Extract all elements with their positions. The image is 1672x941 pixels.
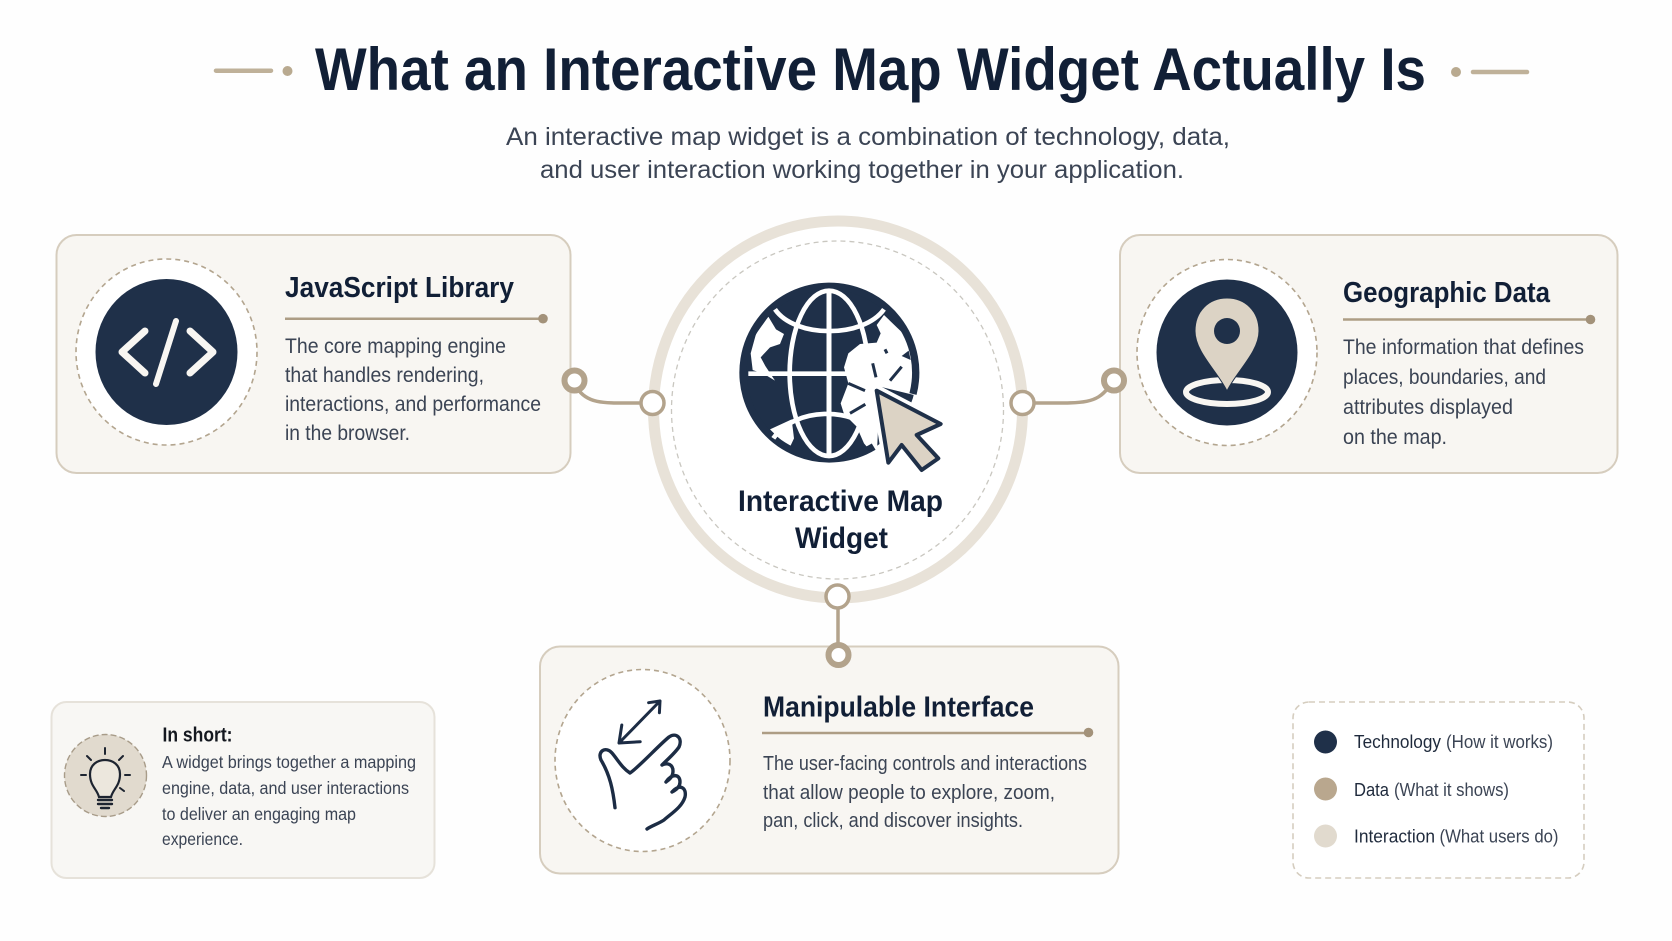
icon: pinch gesture hand — [555, 670, 730, 852]
panel: JavaScript Library — [56, 235, 570, 473]
callout text: experience. — [162, 829, 243, 849]
callout text: to deliver an engaging map — [162, 804, 356, 824]
body text — [763, 753, 1087, 832]
body text: interactions, and performance — [285, 393, 541, 416]
body text — [285, 335, 541, 445]
panel: Geographic Data — [1120, 235, 1618, 473]
subtitle: An interactive map widget is a combination of technology, data, — [506, 123, 1230, 151]
connector: hub to JavaScript Library — [564, 370, 664, 414]
heading rule — [1343, 315, 1595, 324]
subtitle — [506, 123, 1230, 184]
body text — [1343, 336, 1584, 449]
body text: The information that defines — [1343, 336, 1584, 359]
callout text — [162, 752, 416, 849]
icon: globe with cursor — [742, 285, 941, 470]
legend — [1293, 702, 1584, 878]
heading: Geographic Data — [1343, 277, 1551, 309]
heading: JavaScript Library — [285, 272, 514, 304]
hub label: Widget — [795, 522, 888, 555]
legend item: Data — [1314, 778, 1509, 800]
legend item: Interaction: Interaction — [1354, 826, 1435, 846]
panel: Manipulable Interface — [540, 646, 1118, 874]
legend item: Interaction: (What users do) — [1440, 826, 1558, 846]
heading rule — [285, 314, 548, 324]
title ornament: right — [1451, 67, 1527, 77]
title ornament: left — [216, 66, 292, 76]
heading rule — [762, 728, 1093, 737]
callout: In short — [52, 702, 434, 878]
hub label: Interactive Map — [738, 485, 943, 518]
legend item: Technology: Technology — [1354, 732, 1441, 752]
hub label — [738, 485, 943, 555]
body text: pan, click, and discover insights. — [763, 810, 1023, 832]
legend item: Technology: (How it works) — [1446, 732, 1553, 752]
body text: The user-facing controls and interactions — [763, 753, 1087, 775]
connector: hub to Manipulable Interface — [826, 585, 849, 665]
body text: in the browser. — [285, 422, 410, 445]
body text: The core mapping engine — [285, 335, 506, 358]
legend item: Technology — [1314, 730, 1553, 754]
icon: location pin — [1137, 260, 1317, 446]
body text: attributes displayed — [1343, 396, 1513, 419]
heading: Manipulable Interface — [763, 692, 1034, 724]
callout text: engine, data, and user interactions — [162, 778, 409, 798]
icon: code brackets — [76, 259, 257, 445]
legend item: Data: (What it shows) — [1394, 780, 1509, 800]
body text: that handles rendering, — [285, 364, 484, 387]
icon: light bulb — [64, 734, 146, 816]
body text: that allow people to explore, zoom, — [763, 782, 1055, 804]
title: What an Interactive Map Widget Actually Is — [315, 36, 1426, 103]
legend item: Interaction — [1314, 824, 1558, 848]
subtitle: and user interaction working together in your application. — [540, 156, 1184, 184]
body text: on the map. — [1343, 426, 1447, 449]
callout heading: In short: — [162, 724, 232, 746]
callout text: A widget brings together a mapping — [162, 752, 416, 772]
connector: hub to Geographic Data — [1011, 370, 1124, 414]
central hub: Interactive Map Widget — [654, 221, 1022, 598]
body text: places, boundaries, and — [1343, 366, 1546, 389]
legend item: Data: Data — [1354, 780, 1390, 800]
